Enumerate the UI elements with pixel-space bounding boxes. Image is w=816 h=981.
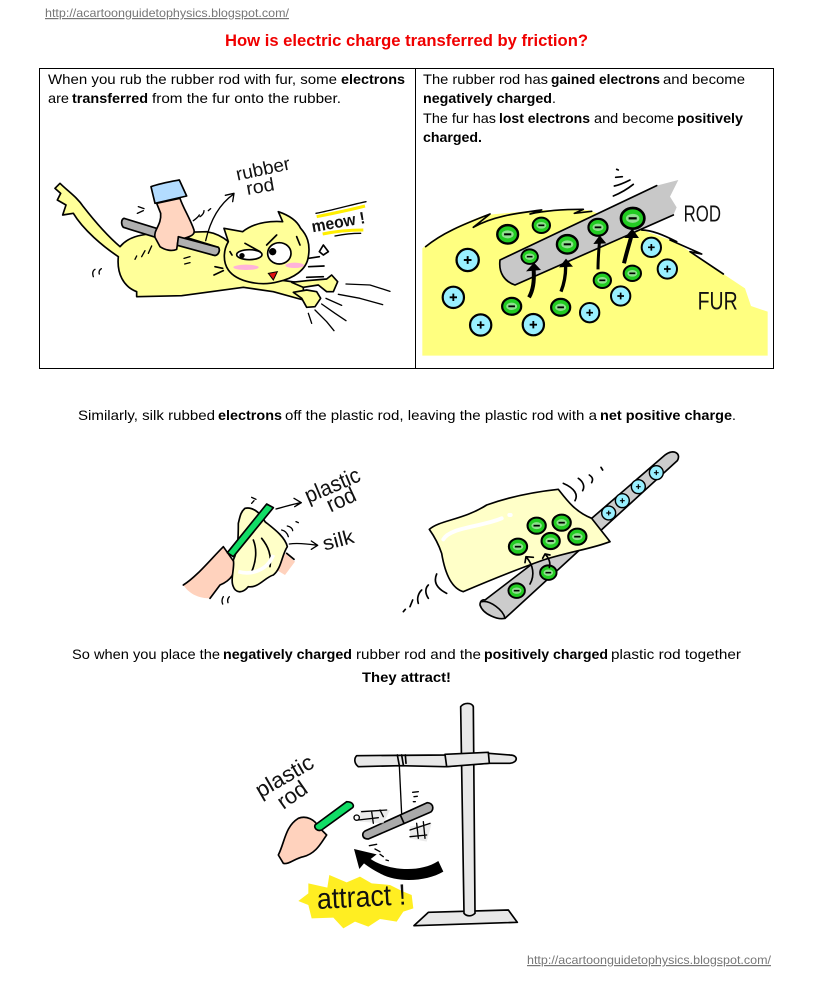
text: silk rubbing plastic rod: . [732,407,736,423]
silk cloth [429,489,610,592]
label: rubber rod [234,153,292,199]
text: charges gained and lost: lost electrons [499,110,590,126]
illustration: silk and plastic rod [183,452,679,619]
silk [232,508,287,592]
green plastic rod [315,802,353,830]
text: charges gained and lost: gained electrons [551,71,660,87]
text: charges gained and lost: . [552,90,556,106]
title: How is electric charge transferred by friction? [225,32,588,50]
fur outline strokes [426,209,723,274]
text: rods placed together: plastic rod together [611,646,741,662]
text: rubbing explanation: transferred [72,90,148,106]
electrons on rod [508,565,557,598]
electrons on rod [521,208,644,264]
positive charges on fur [443,238,677,336]
label: silk: silk [320,526,358,555]
fur motion marks [93,207,211,277]
clamp [445,752,489,767]
text: rods placed together: They attract! [362,669,451,685]
sleeve [151,180,187,203]
text: rods placed together: rubber rod and the [356,646,481,662]
burst: attract: attract ! [316,878,407,916]
hand [278,817,327,864]
cat body and tail [55,183,303,300]
label: rubber rod: rod [244,173,276,199]
text: rods placed together [72,646,741,685]
rubbed plastic rod [480,452,679,619]
rod [500,180,678,285]
text: rubbing explanation: from the fur onto the rubber. [152,90,341,106]
vibration marks [613,169,633,196]
illustration: cat rubbed with rubber rod [55,153,390,331]
text: silk rubbing plastic rod: electrons [218,407,282,423]
text: silk rubbing plastic rod: Similarly, silk rubbed [78,407,215,423]
hand right [277,553,295,575]
electrons on silk [509,515,586,555]
text: charges gained and lost: and become [663,71,745,87]
text: rubbing explanation: electrons [341,71,405,87]
text: charges gained and lost: The fur has [423,110,496,126]
arrow to label [206,193,234,241]
horizontal bar [355,753,516,767]
label: ROD: ROD [684,200,721,226]
text: charges gained and lost: positively [677,110,743,126]
text: charges gained and lost: and become [594,110,674,126]
label: rubber rod: rubber [234,153,292,185]
transfer arrows [525,554,550,584]
motion marks [222,497,298,604]
bottom source link: http://acartoonguidetophysics.blogspot.com/ [527,953,772,967]
text: rubbing explanation: are [48,90,69,106]
fur [422,210,768,356]
attract arrow [354,849,443,880]
text: rods placed together: So when you place the [72,646,220,662]
label: plastic rod: rod [322,482,360,517]
top source link: http://acartoonguidetophysics.blogspot.com/ [45,6,290,20]
text: rods placed together: negatively charged [223,646,352,662]
text: rubbing explanation: When you rub the rubber rod with fur, some [48,71,337,87]
positive charges on rod [602,466,663,520]
text: silk rubbing plastic rod: off the plastic rod, leaving the plastic rod with a [285,407,597,423]
arrows: electrons to rod [526,229,639,297]
burst: attract [298,875,413,928]
scratch marks [308,284,390,331]
string [399,766,402,814]
label: plastic rod: rod [272,775,312,814]
cat paws [292,275,338,307]
label: meow: meow ! [310,208,367,236]
text: rods placed together: positively charged [484,646,608,662]
panel: two-cell table [40,68,774,368]
electrons on fur [497,218,641,316]
text: silk rubbing plastic rod: net positive charge [600,407,732,423]
text: rubbing explanation [48,71,405,106]
motion marks [403,467,603,612]
text: charges gained and lost: The rubber rod has [423,71,548,87]
arrows to labels [276,498,318,549]
hand left [183,547,235,598]
text: charges gained and lost: negatively charged [423,90,552,106]
cat head [224,212,309,284]
illustration: electrons moving from fur to rod [422,169,768,356]
cat face [214,235,328,280]
motion hatch [360,810,432,842]
stand pole [461,703,475,916]
text: silk rubbing plastic rod [78,407,736,423]
illustration: attraction on a retort stand [251,703,517,928]
rubber rod [122,218,219,255]
rod front section [177,237,219,255]
hanging rod [363,803,433,839]
label: plastic rod: plastic [251,749,318,803]
label: FUR: FUR [698,288,738,316]
green plastic rod [227,504,273,557]
hand on rod [155,198,194,250]
text: charges gained and lost [423,71,745,145]
label: plastic rod: plastic [301,462,364,508]
stand base [414,910,517,926]
text: charges gained and lost: charged. [423,129,482,145]
